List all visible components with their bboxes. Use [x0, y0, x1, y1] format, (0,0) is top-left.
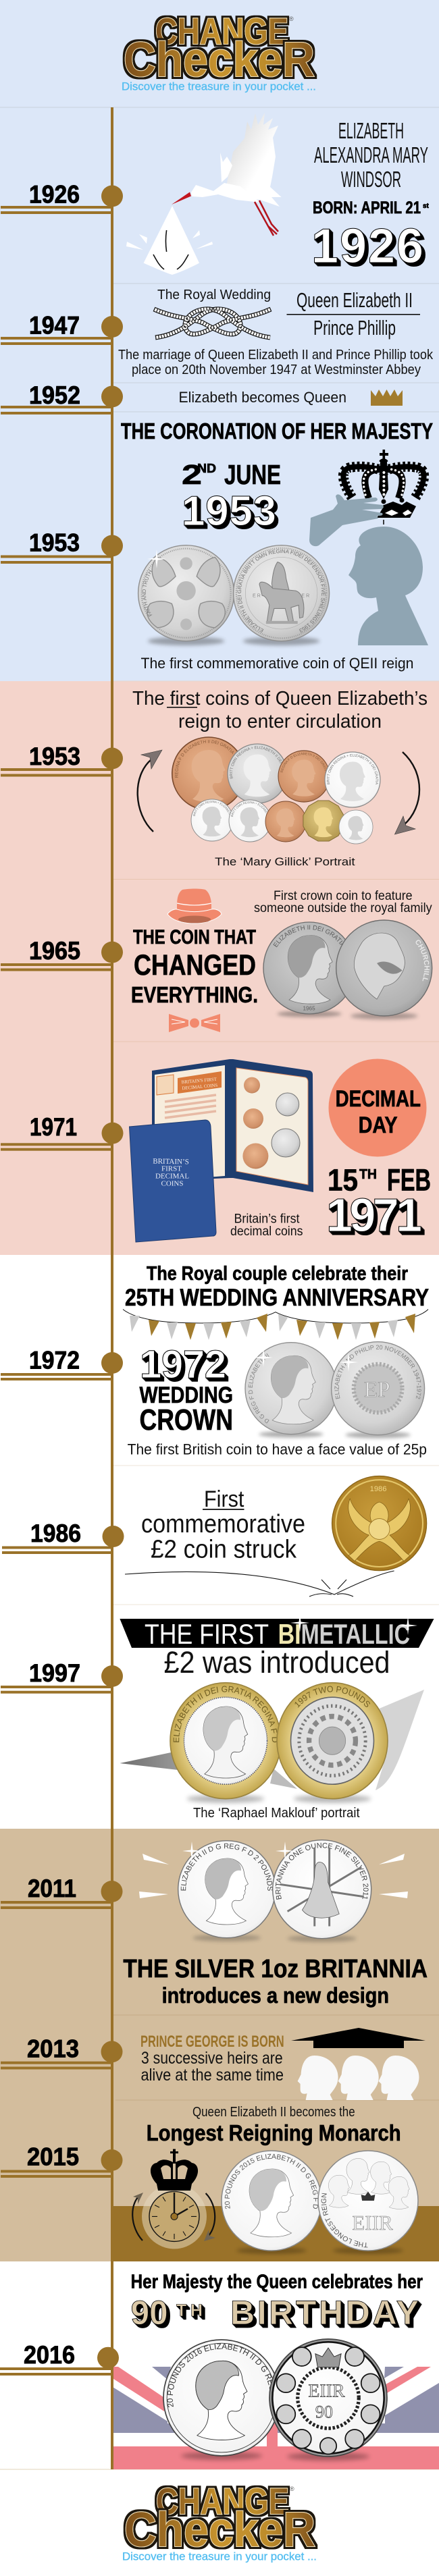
icon: rope knot: [154, 309, 271, 338]
year marker: 1972: 1972: [29, 1346, 80, 1374]
dashed guide line: [383, 520, 384, 542]
badge: decimal day: DECIMAL: [336, 1086, 421, 1112]
book title: BRITAIN’S: [153, 1158, 189, 1166]
coin: 1997 technology reverse: [276, 1682, 388, 1805]
year marker: 1997: 1997: [29, 1659, 80, 1687]
panel: 2011 britannia: [123, 1840, 428, 2008]
coin: 1972 monogram: EP: [364, 1377, 390, 1402]
year marker: 2011: [1, 1875, 123, 1909]
date: 15th feb: 15: [328, 1162, 358, 1198]
big year: 1972: 1972: [140, 1343, 226, 1387]
coin: 1997 raphael maklouf obverse: ELIZABETH II DEI GRATIA REGINA F D: [173, 1686, 277, 1743]
coin: 2011 britannia: [272, 1840, 371, 1944]
coin: 1953 crown reverse: FAITH AND TRUTH: [142, 570, 153, 617]
caption: mary gillick portrait: The ‘Mary Gillick’ Portrait: [215, 855, 355, 868]
date: 15th feb: [328, 1162, 431, 1198]
coin: 1965 queen: 1965: [303, 1006, 315, 1012]
book title: [153, 1158, 189, 1188]
heading: 90th birthday: 90: [131, 2294, 168, 2332]
year marker: 1953 coronation: 1953: [29, 529, 80, 557]
coin: 2015 longest reign: [317, 2150, 419, 2256]
text: queen elizabeth ii becomes the: Queen Elizabeth II becomes the: [192, 2105, 355, 2120]
icon: swoosh flourish: [125, 1571, 394, 1596]
year marker: 1947: 1947: [29, 312, 80, 339]
panel: 2013 prince george: [140, 2028, 425, 2100]
year marker: 2016: [0, 2341, 119, 2376]
icon: black roof shape: [291, 2028, 425, 2048]
year marker: 1926: [1, 181, 123, 214]
year marker: 1947: [1, 312, 123, 345]
coin: 1953 crown reverse: [138, 545, 234, 648]
icon: hand lowering crown: [309, 494, 384, 546]
year marker: 1965: [1, 937, 123, 971]
heading: prince george is born: PRINCE GEORGE IS BORN: [140, 2033, 284, 2051]
coin: shilling one: [190, 799, 231, 841]
coin: 1972 monogram: ELIZABETH AND PHILIP 20 NOVEMBER 1947-1972: [335, 1345, 421, 1399]
inner text: britain's first decimal coins: DECIMAL COINS: [182, 1083, 218, 1091]
icon: closed blue book: [130, 1120, 216, 1242]
coin: half crown: [227, 743, 284, 803]
coin: 1953 crown obverse: ELIZABETH II DEI GRATIA BRITT OMN REGINA FIDEI DEFENSOR FIVE SHILLINGS 1953: [238, 549, 326, 633]
year marker: 1971: 1971: [30, 1113, 77, 1141]
panel: 1953 coronation: [138, 450, 430, 672]
coin: 1972 monogram: [331, 1341, 425, 1441]
name text: [314, 118, 428, 192]
coin: 2011 queen: ELIZABETH II D G REG F D 2 POUNDS: [181, 1843, 272, 1891]
brown band behind 2015: [113, 2206, 439, 2261]
bunting: [123, 1310, 428, 1340]
year marker: 2011: 2011: [28, 1875, 76, 1902]
coins: mary gillick set: [172, 736, 381, 844]
year marker: 2015: [1, 2143, 123, 2178]
icon: bow tie: [169, 1014, 220, 1032]
year marker: 1972: [1, 1346, 123, 1380]
coin: halfpenny: REGINA F D ELIZABETH II DEI GRATIA: [280, 752, 327, 772]
logo word: CHANGE: CHANGE: [155, 10, 288, 52]
heading: the royal wedding: The Royal Wedding: [157, 288, 271, 302]
heading: the coin that changed everything: CHANGED: [134, 949, 256, 982]
year marker: 1986: 1986: [30, 1520, 81, 1547]
panel: 1997 bimetallic: [120, 1618, 434, 1821]
text: three successive heirs: 3 successive heirs are: [141, 2049, 283, 2068]
marriage description: place on 20th November 1947 at Westminster Abbey: [132, 363, 421, 377]
big year: 1953: 1953: [182, 488, 276, 535]
coin: 1997 technology reverse: 1997 TWO POUNDS: [294, 1686, 370, 1708]
sparkles: [254, 1348, 358, 1372]
coin: half crown: BRITT OMN REGINA + ELIZABETH II DEI GRATIA: [230, 746, 282, 779]
coin: farthing: [265, 801, 306, 842]
year marker: 1926: 1926: [29, 181, 80, 209]
arrow: clock left: [132, 2193, 143, 2240]
text: first crown coin: First crown coin to feature: [274, 889, 413, 903]
icon: crown: [343, 450, 424, 518]
badge: decimal day: [328, 1058, 427, 1157]
panel: 1926 birth: [126, 113, 430, 275]
coin: 2016 queen: 20 POUNDS 2016 ELIZABETH II D G REG F D: [167, 2344, 272, 2407]
date: 15th feb: TH: [359, 1167, 377, 1182]
text: £2 was introduced: £2 was introduced: [163, 1645, 390, 1680]
panel: 1953 first circulation coins: [132, 688, 428, 868]
panel: 2015 longest reigning: [132, 2105, 419, 2256]
coin: 2011 queen: [178, 1840, 274, 1943]
heading: 90th birthday: BIRTHDAY: [230, 2294, 419, 2332]
panel: 1952 accession: [178, 389, 403, 406]
sparkle: [147, 549, 166, 568]
names: Prince Phillip: [313, 316, 396, 340]
arrow: clock right: [204, 2193, 215, 2241]
footer tagline: Discover the treasure in your pocket ...: [122, 2550, 317, 2562]
coin: 2015 queen: [221, 2150, 320, 2256]
footer registered mark: ®: [290, 2486, 294, 2492]
coin: shilling one: BRITT OMN REGINA + ELIZABETH: [193, 801, 230, 816]
icon: queen silhouette: [348, 527, 428, 645]
coin: 1953 crown obverse: E R: [253, 593, 261, 598]
coin: 1972 queen: [244, 1342, 334, 1440]
book title: COINS: [161, 1180, 184, 1188]
year marker: 1971: [1, 1113, 123, 1151]
union flag: [113, 2367, 439, 2469]
inner text: britain's first decimal coins: BRITAIN'S FIRST: [181, 1077, 217, 1085]
icon: crown on clock: [142, 2149, 207, 2249]
icon: open presentation folder: [152, 1059, 313, 1192]
text: first commemorative £2 coin struck: £2 coin struck: [151, 1536, 297, 1564]
icon: gold crown: [371, 390, 403, 406]
year marker: 2013: [1, 2035, 123, 2070]
heading: the coin that changed everything: THE COIN THAT: [133, 926, 256, 948]
logo: Change Checker header: [122, 10, 316, 93]
date: 2nd june: JUNE: [224, 459, 281, 490]
banner: the first bimetallic: THE FIRST: [145, 1618, 269, 1650]
coin: halfpenny: [278, 750, 328, 803]
year marker: 1953 circulation: [1, 743, 123, 776]
text: first crown coin: [254, 889, 432, 915]
big year: 1971: 1971: [326, 1189, 422, 1241]
names: [286, 288, 420, 340]
coin: 1986 gold £2: 1986: [370, 1485, 386, 1493]
icon: hat: [167, 888, 222, 923]
caption: britain's first decimal coins: [230, 1212, 303, 1239]
coin: florin: BRITT OMN REGINA + ELIZABETH II DEI GRATIA: [327, 753, 378, 784]
coin: 2015 longest reign: THE LONGEST REIGN: [321, 2193, 367, 2248]
panel: 1965 churchill crown: [131, 888, 432, 1032]
heading: first coins: The first coins of Queen Elizabeth’s: [132, 688, 428, 709]
coin: penny: [172, 736, 238, 808]
caption: first british 25p: The first British coin to have a face value of 25p: [128, 1441, 427, 1458]
caption: raphael maklouf portrait: The ‘Raphael Maklouf’ portrait: [193, 1806, 360, 1821]
heading: the coin that changed everything: [131, 926, 258, 1007]
heading: 90th birthday: TH: [176, 2301, 203, 2320]
date: 2nd june: [182, 459, 281, 490]
text: three successive heirs: alive at the same time: [140, 2066, 284, 2085]
caption: britain's first decimal coins: Britain’s first: [234, 1212, 300, 1227]
coin: 1965 churchill: CHURCHILL: [416, 940, 430, 982]
coin: shilling two: BRITT OMN REGINA + ELIZABETH: [231, 801, 267, 817]
book title: FIRST: [161, 1165, 182, 1173]
marriage description: [118, 348, 434, 377]
banner: the first bimetallic: METALLIC: [301, 1618, 410, 1650]
heading: the coin that changed everything: EVERYTHING.: [131, 982, 258, 1007]
date: 2nd june: ND: [197, 462, 216, 475]
coin: 1965 queen: ELIZABETH II DEI GRATIA: [273, 925, 343, 948]
footer word: Checker: CheckeR: [124, 2503, 315, 2557]
heading: wedding crown: [139, 1383, 233, 1437]
year marker: 1986: [2, 1520, 124, 1554]
heading: longest reigning monarch: Longest Reigning Monarch: [147, 2120, 401, 2145]
tagline: Discover the treasure in your pocket ...: [122, 80, 316, 93]
sparkles: [182, 1842, 294, 1860]
year marker: 1997: [1, 1659, 123, 1694]
caption: first commemorative coin: The first commemorative coin of QEII reign: [140, 655, 413, 672]
icon: three heads: [298, 2056, 419, 2100]
coin: sixpence: [339, 810, 373, 844]
banner: the first bimetallic: BI: [278, 1618, 301, 1650]
text: three successive heirs: [140, 2049, 284, 2085]
subheading: introduces a new design: introduces a new design: [162, 1983, 389, 2008]
panel: 2016 90th birthday: [113, 2272, 439, 2469]
big year: 1926: 1926: [311, 219, 423, 273]
caption: britain's first decimal coins: decimal coins: [230, 1225, 303, 1239]
year marker: 2013: 2013: [27, 2035, 79, 2063]
coin: 2016 queen: [163, 2339, 274, 2463]
panel: 1972 silver wedding: [123, 1263, 429, 1458]
panel: 1947 royal wedding: [118, 288, 434, 377]
coin: 1953 crown obverse: E R: [301, 593, 309, 598]
panel: 1971 decimal day: [130, 1058, 431, 1242]
date: 2nd june: 2: [182, 459, 202, 490]
coin: 1965 queen: [263, 921, 346, 1019]
year marker: 1952: [1, 381, 123, 414]
timeline spine: [111, 107, 113, 2469]
arrow: rotate left: [138, 750, 162, 832]
coin: threepence: [303, 801, 344, 841]
year marker: 1953 coronation: [1, 529, 123, 564]
born date: st: [423, 203, 430, 210]
text: first crown coin: someone outside the royal family: [254, 901, 432, 915]
panel: 1986 commemorative: [125, 1476, 427, 1596]
coin: 2015 longest reign: EIIR: [352, 2211, 393, 2234]
coin: 2011 britannia: BRITANNIA ONE OUNCE FINE SILVER 2011: [276, 1843, 369, 1900]
logo: Change Checker footer: [122, 2480, 317, 2562]
background shards: [120, 1690, 424, 1790]
icon: stork carrying bundle: [126, 113, 282, 275]
heading: first coins: reign to enter circulation: [178, 711, 382, 732]
registered mark: ®: [289, 16, 294, 22]
heading: wedding crown: WEDDING: [139, 1383, 233, 1408]
coin: shilling two: [228, 799, 269, 842]
year marker: 1965: 1965: [29, 937, 80, 965]
text: first commemorative £2 coin struck: commemorative: [141, 1510, 305, 1538]
heading: first coins: [132, 688, 428, 732]
arrow: rotate right: [394, 752, 419, 834]
coin: penny: REGINA F D ELIZABETH II DEI GRATIA BRITT OMN: [174, 740, 234, 778]
year marker: 1952: 1952: [29, 381, 80, 409]
badge: decimal day: DAY: [359, 1112, 398, 1138]
inner text: britain's first decimal coins: [181, 1077, 218, 1091]
coin: 2016 ER 90: 90: [315, 2403, 333, 2422]
coin: 1972 queen: D G REG F D ELIZABETH II: [249, 1353, 269, 1423]
coin: 2016 ER 90: [269, 2339, 387, 2461]
heading: wedding crown: CROWN: [139, 1403, 233, 1437]
footer word: CHANGE: CHANGE: [156, 2480, 289, 2522]
heading: 90th birthday: [131, 2294, 419, 2332]
book title: DECIMAL: [155, 1172, 189, 1180]
logo word: Checker: CheckeR: [124, 33, 315, 87]
caption: elizabeth becomes queen: Elizabeth becomes Queen: [178, 389, 346, 406]
coin: 2016 ER 90: EIIR: [308, 2380, 345, 2401]
year marker: 2015: 2015: [27, 2143, 79, 2171]
year marker: 1953 circulation: 1953: [29, 743, 80, 770]
coin: 2015 queen: 20 POUNDS 2015 ELIZABETH II D G REG F D: [224, 2153, 318, 2209]
light rays: [139, 1854, 408, 1898]
year marker: 2016: 2016: [24, 2341, 75, 2369]
text: first commemorative £2 coin struck: First: [204, 1486, 244, 1512]
coin: 1997 raphael maklouf obverse: [170, 1682, 279, 1805]
coin: florin: [324, 751, 381, 808]
text: first commemorative £2 coin struck: [141, 1486, 305, 1564]
coin: 1986 gold £2: [332, 1476, 427, 1571]
coin: 1965 churchill: [336, 919, 432, 1022]
banner: the first bimetallic: [120, 1613, 434, 1650]
